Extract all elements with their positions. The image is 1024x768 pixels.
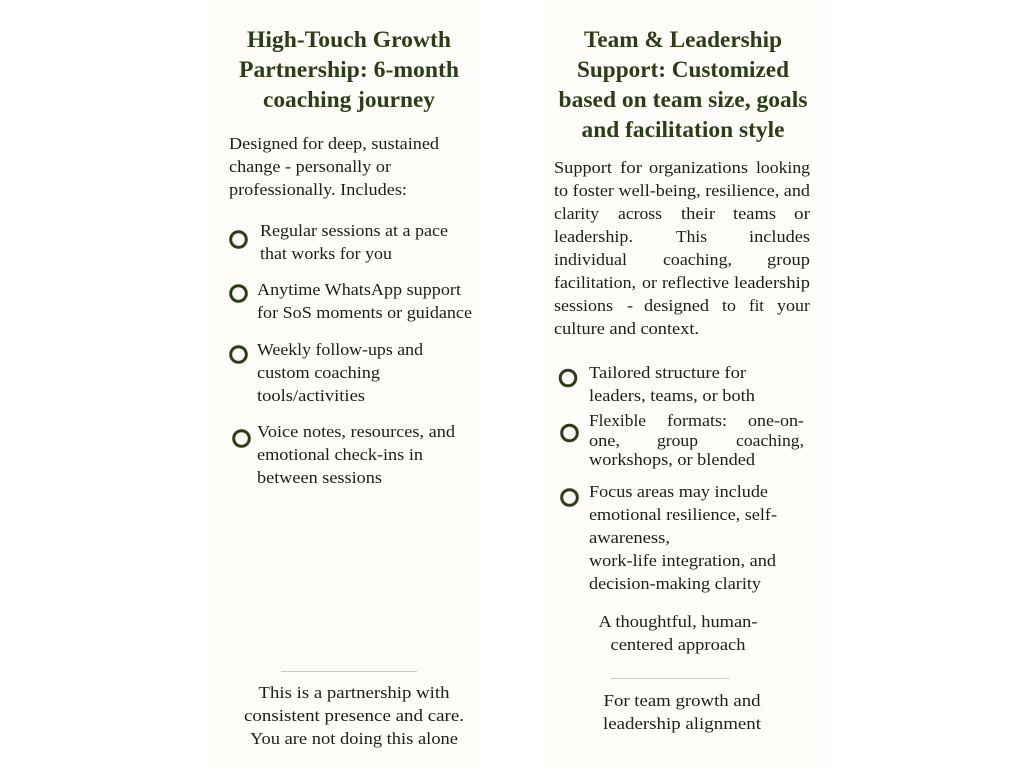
list item: flexible formats: coaching,	[736, 431, 804, 450]
list item: regular sessions	[231, 221, 448, 263]
intro paragraph: clarity	[554, 204, 600, 223]
list item: WhatsApp support: Anytime WhatsApp support	[257, 280, 461, 299]
intro paragraph: across	[618, 204, 662, 223]
list item: flexible formats: Flexible	[589, 411, 646, 430]
list item: focus areas: decision-making clarity	[589, 574, 762, 593]
list item: focus areas: Focus areas may include	[589, 482, 768, 501]
intro text: Designed for deep, sustained	[229, 134, 440, 153]
intro paragraph: group	[767, 250, 810, 269]
intro paragraph: or	[642, 273, 657, 292]
intro paragraph: individual	[554, 250, 627, 269]
closing note: You are not doing this alone	[250, 729, 458, 748]
list item: weekly follow-ups	[231, 340, 424, 405]
intro paragraph: for	[620, 158, 642, 177]
intro paragraph: your	[777, 296, 810, 315]
closing note: For team growth and	[604, 691, 761, 710]
list item: flexible formats: workshops, or blended	[589, 450, 756, 469]
heading: Team and Leadership Support	[558, 27, 808, 143]
heading: High-Touch Growth Partnership: coaching journey	[263, 87, 435, 113]
list item: tailored structure	[560, 363, 756, 405]
list item: focus areas	[562, 482, 777, 593]
approach statement: centered approach	[610, 635, 746, 654]
list item: voice notes	[234, 422, 456, 487]
list item: WhatsApp support: for SoS moments or guidance	[257, 303, 472, 322]
intro paragraph: coaching,	[663, 250, 732, 269]
list item: voice notes: emotional check-ins in	[257, 445, 424, 464]
list item: flexible formats: one-on-	[748, 411, 804, 430]
list item: flexible formats: formats:	[667, 411, 727, 430]
intro paragraph: This	[676, 227, 707, 246]
list item: flexible formats: group	[657, 431, 698, 450]
intro paragraph: to	[722, 296, 736, 315]
intro paragraph: culture and context.	[554, 319, 699, 338]
closing note	[603, 678, 761, 733]
intro text: professionally. Includes:	[229, 180, 407, 199]
closing note	[244, 672, 464, 748]
intro paragraph: organizations	[649, 158, 748, 177]
heading: High-Touch Growth Partnership	[239, 27, 459, 113]
list item: focus areas: work-life integration, and	[589, 551, 777, 570]
heading: Team and Leadership Support: based on team size, goals	[558, 87, 808, 113]
list item: focus areas: emotional resilience, self-	[589, 505, 777, 524]
heading: Team and Leadership Support: and facilitation style	[582, 117, 784, 143]
list item: flexible formats: one,	[589, 431, 620, 450]
intro paragraph: leadership	[734, 273, 810, 292]
intro paragraph	[554, 158, 811, 338]
heading: Team and Leadership Support: Support: Customized	[577, 57, 789, 83]
list item: weekly follow-ups: tools/activities	[257, 386, 365, 405]
heading: High-Touch Growth Partnership: High-Touch Growth	[247, 27, 451, 53]
intro paragraph: -	[627, 296, 633, 315]
intro text	[229, 134, 440, 199]
list item: weekly follow-ups: custom coaching	[257, 363, 381, 382]
list item: voice notes: Voice notes, resources, and	[257, 422, 456, 441]
intro paragraph: or	[794, 204, 810, 223]
list item: flexible formats	[562, 411, 804, 469]
heading: High-Touch Growth Partnership: Partnership: 6-month	[239, 57, 459, 83]
panel: High-Touch Growth Partnership	[212, 0, 481, 768]
panel: Team and Leadership Support	[545, 0, 825, 768]
approach statement	[598, 612, 758, 654]
list item: tailored structure: Tailored structure for	[589, 363, 746, 382]
intro paragraph: teams	[733, 204, 776, 223]
intro paragraph: their	[681, 204, 715, 223]
list item: tailored structure: leaders, teams, or both	[589, 386, 756, 405]
closing note: consistent presence and care.	[244, 706, 464, 725]
list item: weekly follow-ups: Weekly follow-ups and	[257, 340, 424, 359]
list item: regular sessions: Regular sessions at a pace	[260, 221, 448, 240]
closing note: This is a partnership with	[258, 683, 450, 702]
intro paragraph: Support	[554, 158, 612, 177]
intro paragraph: sessions	[554, 296, 613, 315]
intro paragraph: to foster well-being, resilience, and	[554, 181, 811, 200]
closing note: leadership alignment	[603, 714, 761, 733]
list item: voice notes: between sessions	[257, 468, 382, 487]
list item: WhatsApp support	[231, 280, 472, 322]
intro text: change - personally or	[229, 157, 391, 176]
intro paragraph: looking	[756, 158, 811, 177]
intro paragraph: includes	[749, 227, 810, 246]
intro paragraph: reflective	[662, 273, 729, 292]
intro paragraph: leadership.	[554, 227, 633, 246]
heading: Team and Leadership Support: Team & Leadership	[584, 27, 782, 53]
intro paragraph: designed	[644, 296, 710, 315]
approach statement: A thoughtful, human-	[598, 612, 758, 631]
list item: focus areas: awareness,	[589, 528, 670, 547]
intro paragraph: facilitation,	[554, 273, 636, 292]
list item: regular sessions: that works for you	[260, 244, 393, 263]
intro paragraph: fit	[749, 296, 764, 315]
